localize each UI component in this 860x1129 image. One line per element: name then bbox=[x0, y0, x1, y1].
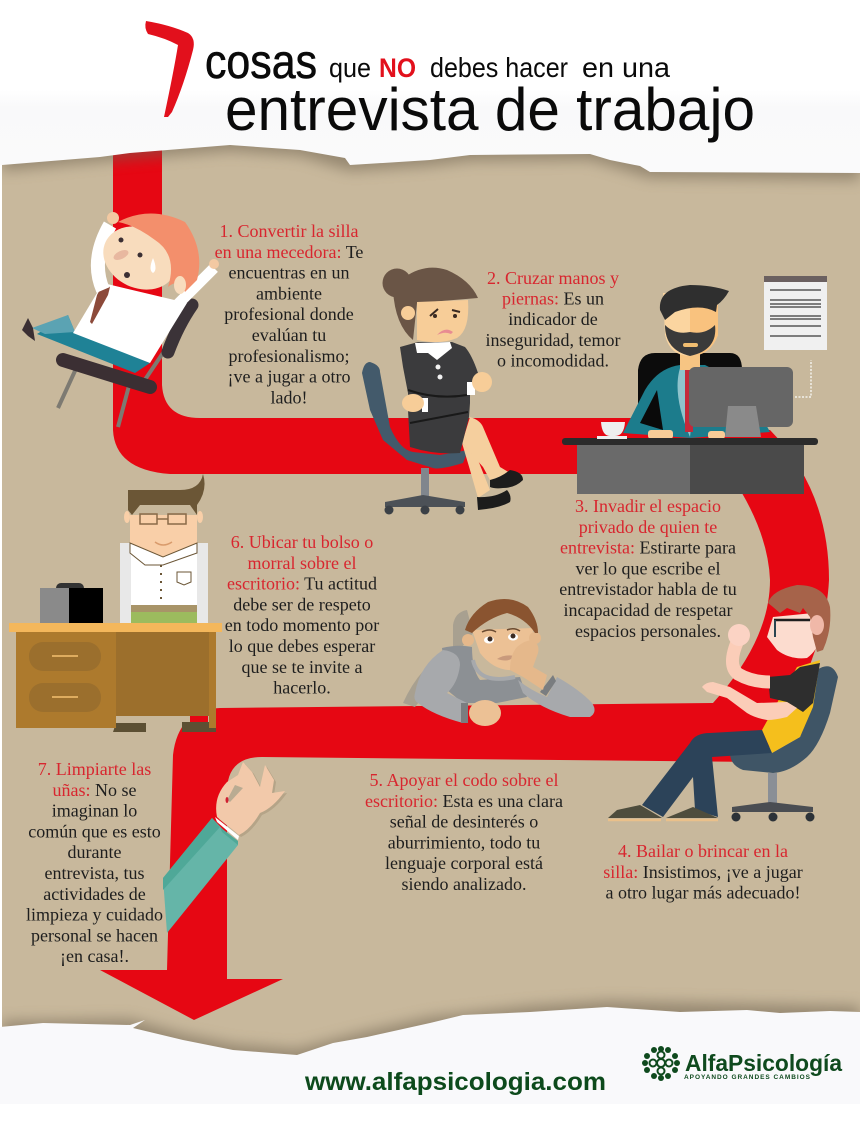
text block 3: 3. Invadir el espacio bbox=[575, 496, 721, 516]
text block 7: No se bbox=[90, 780, 137, 800]
text block 6: hacerlo. bbox=[273, 678, 331, 698]
text block 2: indicador de bbox=[508, 309, 598, 329]
text block 3: privado de quien te bbox=[579, 517, 717, 537]
text block 7: personal se hacen bbox=[31, 925, 158, 945]
text block 5: Esta es una clara bbox=[438, 791, 563, 811]
bottom torn paper bbox=[0, 1007, 860, 1104]
text block 6: Tu actitud bbox=[300, 574, 377, 594]
text block 2: piernas: bbox=[502, 289, 559, 309]
entrevista de trabajo: entrevista de trabajo bbox=[225, 76, 755, 143]
text block 3: ver lo que escribe el bbox=[576, 558, 720, 578]
text block 2: inseguridad, temor bbox=[486, 330, 620, 350]
que: que bbox=[329, 53, 371, 83]
figure 1: man tilting on chair bbox=[22, 212, 219, 427]
red path: winding arrow bbox=[100, 140, 829, 1020]
text block 1: ambiente bbox=[256, 283, 322, 303]
text block 3: entrevistador habla de tu bbox=[559, 579, 737, 599]
text block 6: morral sobre el bbox=[248, 553, 356, 573]
text block 7: entrevista, tus bbox=[45, 863, 144, 883]
text block 1: encuentras en un bbox=[229, 263, 349, 283]
text block 7: común que es esto bbox=[28, 821, 161, 841]
text block 7: ¡en casa!. bbox=[60, 946, 129, 966]
text block 1: Te bbox=[342, 242, 363, 262]
text block 5: escritorio: bbox=[365, 791, 438, 811]
text block 5: siendo analizado. bbox=[402, 874, 526, 894]
text block 3: entrevista: bbox=[560, 538, 635, 558]
text block 7: 7. Limpiarte las bbox=[38, 759, 151, 779]
text block 1: evalúan tu bbox=[252, 325, 326, 345]
figure 5: bored man leaning on desk bbox=[403, 599, 595, 726]
text block 6: 6. Ubicar tu bolso o bbox=[231, 532, 373, 552]
title bbox=[145, 21, 755, 143]
text block 1: 1. Convertir la silla bbox=[220, 221, 358, 241]
website url: www.alfapsicologia.com bbox=[304, 1068, 606, 1096]
figure 6: man with bag on desk bbox=[9, 474, 222, 732]
text block 6: lo que debes esperar bbox=[229, 636, 375, 656]
text block 3: incapacidad de respetar bbox=[564, 600, 732, 620]
text block 7: durante bbox=[68, 842, 121, 862]
logo flower icon bbox=[642, 1046, 680, 1081]
text block 6: escritorio: bbox=[227, 574, 300, 594]
text block 5: aburrimiento, todo tu bbox=[388, 832, 540, 852]
top torn paper bbox=[0, 0, 860, 173]
figure 2: woman with crossed arms and legs bbox=[362, 268, 523, 514]
text block 2: Es un bbox=[559, 289, 604, 309]
text block 4: silla: bbox=[603, 862, 638, 882]
text block 4: 4. Bailar o brincar en la bbox=[618, 841, 788, 861]
figure 7: hand cleaning nails bbox=[163, 762, 287, 933]
text block 4: Insistimos, ¡ve a jugar bbox=[638, 862, 803, 882]
en una: en una bbox=[582, 52, 670, 83]
text block 6: que se te invite a bbox=[242, 657, 362, 677]
NO: NO bbox=[379, 53, 416, 83]
debes hacer: debes hacer bbox=[430, 52, 568, 83]
torn paper shadow top bbox=[2, 145, 860, 186]
text block 7: imaginan lo bbox=[52, 801, 137, 821]
bag on desk bbox=[40, 583, 103, 623]
text block 6: debe ser de respeto bbox=[233, 594, 371, 614]
text block 7: uñas: bbox=[52, 780, 90, 800]
figure 4: young man swinging on chair bbox=[608, 585, 838, 822]
text block 2: o incomodidad. bbox=[497, 350, 609, 370]
text block 5: lenguaje corporal está bbox=[385, 853, 543, 873]
document bbox=[764, 276, 827, 350]
text block 7: actividades de bbox=[43, 884, 146, 904]
logo tagline: APOYANDO GRANDES CAMBIOS bbox=[684, 1074, 811, 1081]
text block 7: limpieza y cuidado bbox=[26, 905, 163, 925]
coffee cup bbox=[597, 422, 627, 439]
text block 1: profesionalismo; bbox=[229, 346, 349, 366]
text block 1: profesional donde bbox=[224, 304, 354, 324]
logo: AlfaPsicología bbox=[642, 1046, 842, 1081]
text block 2: 2. Cruzar manos y bbox=[487, 268, 619, 288]
logo name: AlfaPsicología bbox=[685, 1050, 842, 1076]
text block 1: en una mecedora: bbox=[215, 242, 342, 262]
figure 3: interviewer at desk with computer bbox=[562, 276, 827, 494]
text block 1: ¡ve a jugar a otro bbox=[228, 367, 350, 387]
text block 5: 5. Apoyar el codo sobre el bbox=[370, 770, 558, 790]
torn paper shadow bottom bbox=[2, 994, 860, 1055]
big red seven bbox=[145, 21, 194, 117]
text block 4: a otro lugar más adecuado! bbox=[606, 883, 800, 903]
text block 5: señal de desinterés o bbox=[390, 812, 538, 832]
text block 3: espacios personales. bbox=[575, 621, 721, 641]
text block 3: Estirarte para bbox=[635, 538, 736, 558]
text block 1: lado! bbox=[271, 387, 307, 407]
text block 6: en todo momento por bbox=[225, 615, 379, 635]
cosas: cosas bbox=[205, 36, 317, 89]
